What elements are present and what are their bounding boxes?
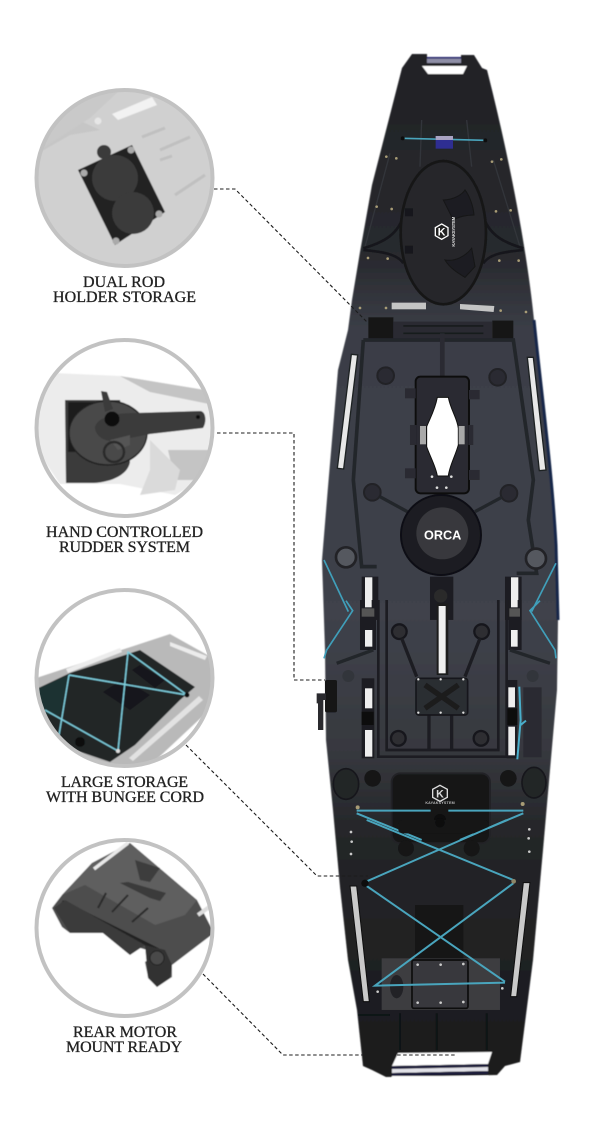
- side bungee: [324, 601, 556, 658]
- ring: [36, 340, 212, 516]
- seat mount plate: [416, 377, 469, 493]
- lower deck with rails, plate and rear hatch: K: [436, 788, 444, 800]
- label: RUDDER SYSTEM: [59, 539, 190, 556]
- mid deck with seat mount and ORCA hatch: ORCA: [424, 528, 461, 542]
- bow bungee and flag: [403, 138, 485, 140]
- side rails: [337, 354, 358, 469]
- ring: [36, 90, 212, 266]
- storage floor: [30, 650, 195, 762]
- callout leader: rod holder: [214, 189, 367, 322]
- bow deck and oval hatch: [359, 120, 527, 340]
- lower rails: [362, 678, 374, 758]
- oval hatch: [401, 161, 486, 304]
- hatch logo: [435, 224, 448, 239]
- panel: hand controlled rudder system: [30, 338, 220, 556]
- side ports: [336, 547, 356, 567]
- callout leader: motor mount: [203, 974, 456, 1055]
- rudder lever: [95, 411, 205, 441]
- label: HAND CONTROLLED: [46, 524, 203, 541]
- centre X plate: [416, 678, 468, 715]
- photo: storage deck: [38, 634, 210, 764]
- rudder housing: [65, 400, 130, 483]
- kayak hull: [322, 54, 558, 1080]
- photo: rod holder: [35, 88, 215, 268]
- rear pods: [333, 769, 359, 799]
- panel: dual rod holder storage: [35, 88, 215, 306]
- rear hatch: [392, 773, 490, 843]
- label: HOLDER STORAGE: [53, 289, 196, 306]
- stern deck with X bungee and handle: [350, 818, 531, 1050]
- rear hatch bungee: [357, 811, 523, 840]
- photo: rudder: [38, 373, 210, 496]
- label: WITH BUNGEE CORD: [46, 789, 204, 806]
- lower deck with rails, plate and rear hatch: KAYAKSYSTEM: [425, 801, 455, 805]
- bow deck and oval hatch: K: [438, 226, 446, 238]
- callout leader: storage: [186, 745, 368, 876]
- stern blocks: [358, 1013, 487, 1050]
- ring: [36, 590, 212, 766]
- label: DUAL ROD: [83, 274, 165, 291]
- callout leader: rudder: [217, 433, 325, 680]
- ORCA round hatch: [401, 495, 481, 575]
- holder plate: [78, 145, 165, 245]
- panel: rear motor mount ready: [35, 838, 215, 1056]
- stern rails: [350, 886, 369, 1002]
- lower deck with rails, plate and rear hatch: [317, 600, 556, 843]
- cup recesses: [391, 624, 489, 746]
- bow deck and oval hatch: KAYAKSYSTEM: [451, 216, 456, 247]
- label: REAR MOTOR: [73, 1024, 177, 1041]
- stern plate: [412, 960, 468, 1008]
- deck rails: [392, 303, 426, 309]
- mid deck with seat mount and ORCA hatch: [324, 333, 556, 620]
- kayak top view: [317, 54, 558, 1080]
- rudder handle: [325, 680, 337, 712]
- photo: rear of kayak: [52, 842, 210, 988]
- stern bungee: [366, 820, 513, 986]
- side bungee: [324, 560, 556, 612]
- panel: large storage with bungee cord: [30, 588, 220, 806]
- storage bungee: [45, 652, 187, 751]
- label: LARGE STORAGE: [61, 774, 188, 791]
- label: MOUNT READY: [66, 1039, 182, 1056]
- ring: [36, 840, 212, 1016]
- seat rail blocks: [368, 317, 393, 340]
